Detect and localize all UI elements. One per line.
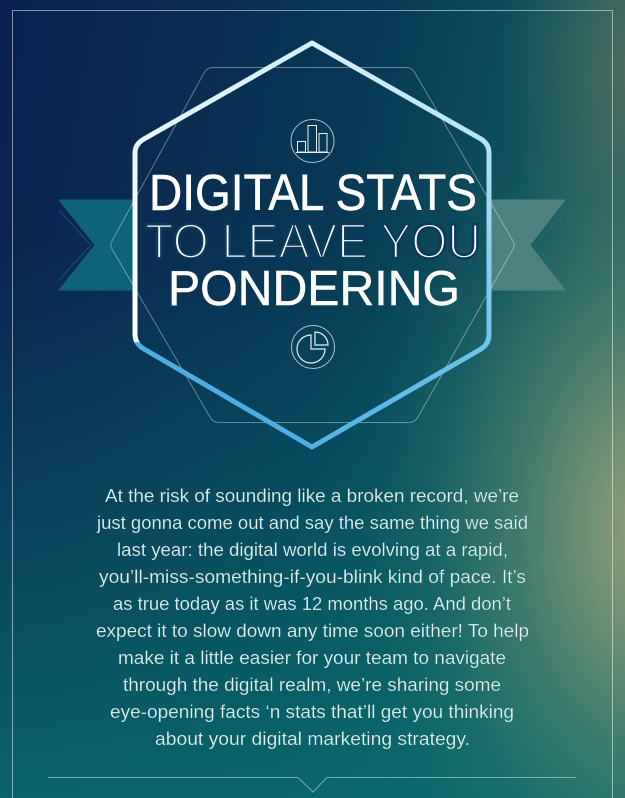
intro paragraph: through the digital realm, we’re sharing some [123,674,501,695]
intro paragraph: At the risk of sounding like a broken record, we’re [105,485,519,506]
ribbon: left [59,200,135,290]
thin outer hexagon [111,68,514,422]
intro paragraph: you’ll-miss-something-if-you-blink kind of pace. It’s [99,566,526,587]
intro paragraph [96,485,529,749]
intro paragraph: expect it to slow down any time soon either! To help [96,620,529,641]
ribbon: right [491,200,566,290]
title [145,164,481,316]
divider with notch [48,778,576,792]
intro paragraph: about your digital marketing strategy. [155,728,470,749]
intro paragraph: as true today as it was 12 months ago. And don’t [113,593,511,614]
icon: bar chart [291,120,334,162]
icon: pie chart [292,326,334,368]
intro paragraph: eye-opening facts ‘n stats that’ll get you thinking [110,701,514,722]
main hexagon [135,43,489,447]
title line 2: TO LEAVE YOU [145,215,481,269]
intro paragraph: make it a little easier for your team to navigate [118,647,506,668]
intro paragraph: last year: the digital world is evolving at a rapid, [117,539,508,560]
intro paragraph: just gonna come out and say the same thing we said [96,512,528,533]
title line 1: DIGITAL STATS [149,164,477,221]
title line 3: PONDERING [168,262,460,316]
